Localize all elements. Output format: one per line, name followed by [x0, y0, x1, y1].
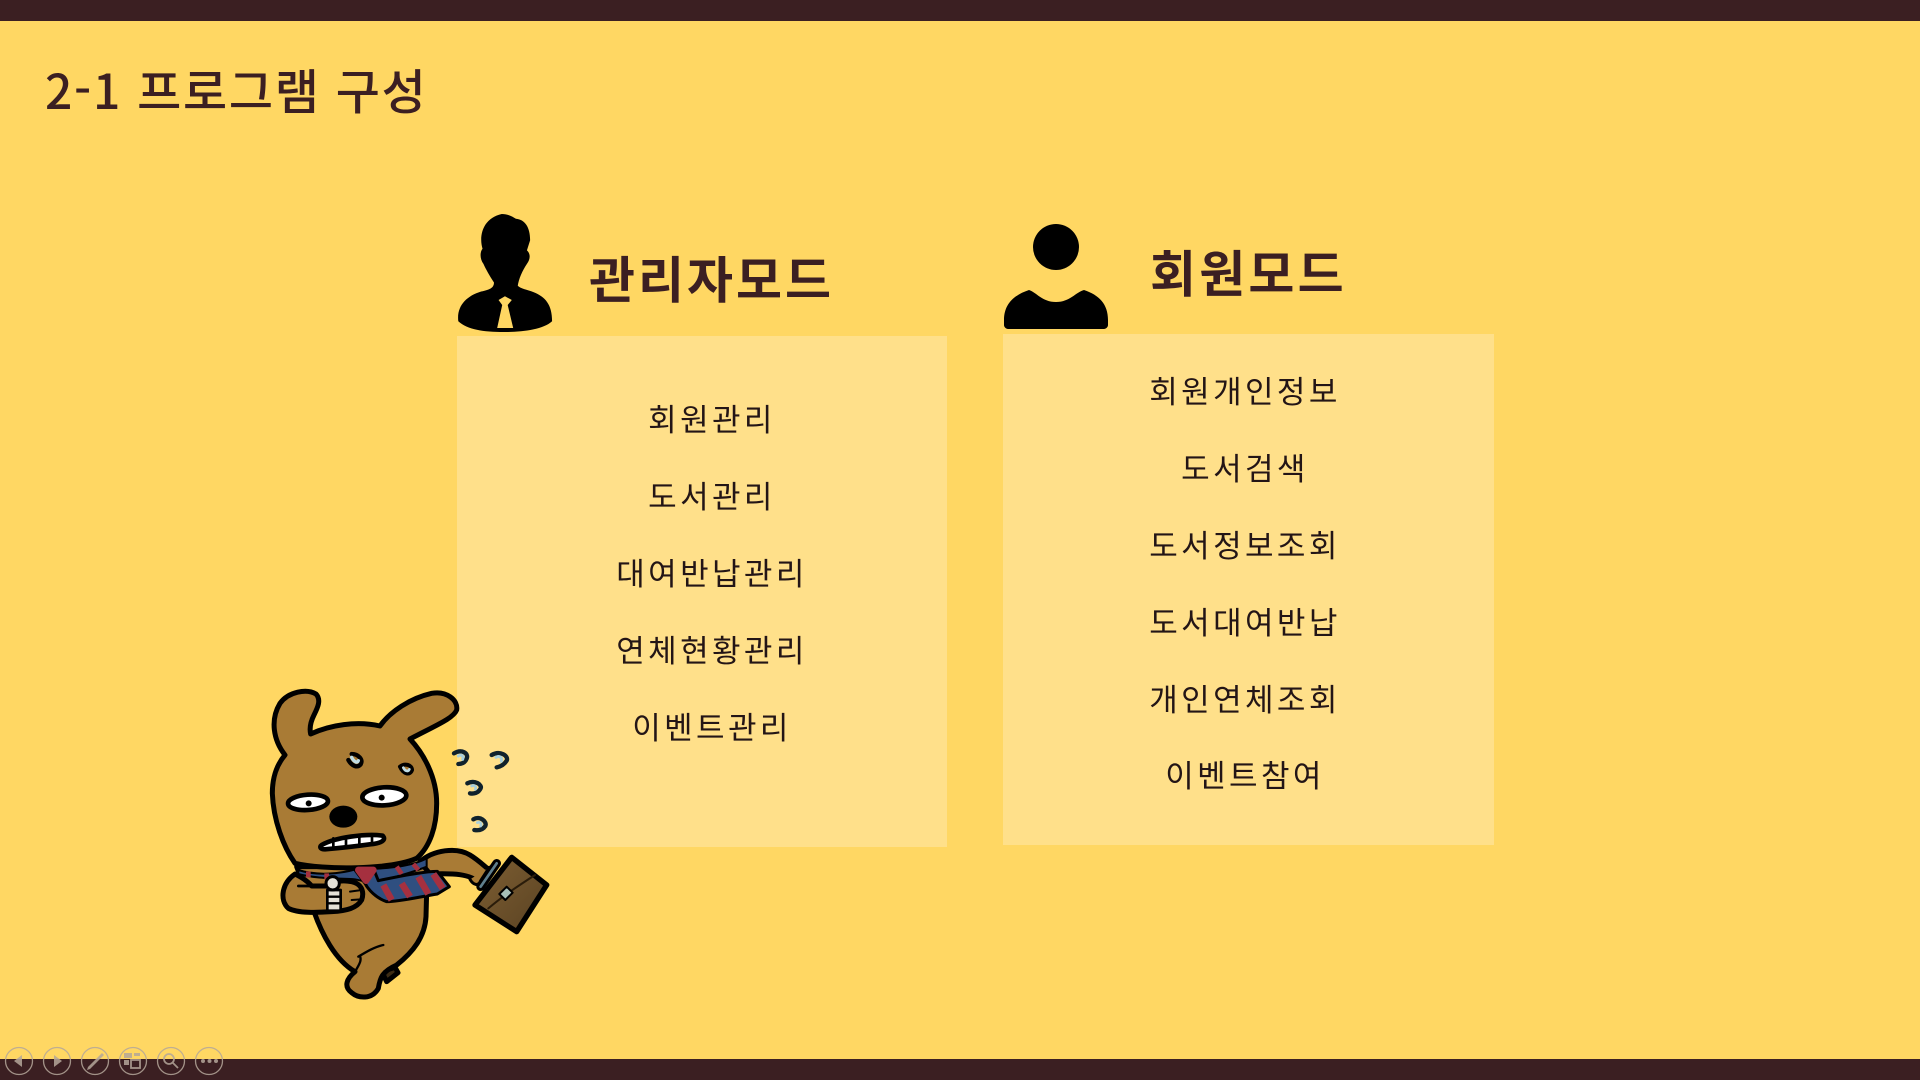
watch — [327, 890, 341, 911]
admin list item: 이벤트관리 — [632, 711, 792, 746]
panel: admin mode — [457, 336, 947, 847]
briefcase handle — [481, 863, 497, 887]
member list item: 개인연체조회 — [1149, 683, 1341, 718]
icon: admin person with tie — [458, 214, 552, 332]
admin list item: 대여반납관리 — [616, 557, 808, 592]
member list item: 도서정보조회 — [1149, 529, 1341, 564]
admin list item: 회원관리 — [648, 403, 776, 438]
mouth — [320, 835, 384, 849]
icon: member person — [1004, 224, 1108, 329]
scarf band — [298, 858, 427, 883]
pupils and nose — [306, 795, 385, 828]
title: 2-1 프로그램 구성 — [45, 53, 427, 123]
member list item: 도서검색 — [1181, 452, 1309, 487]
left arm and hand — [283, 874, 363, 912]
admin list item: 도서관리 — [648, 480, 776, 515]
briefcase — [475, 857, 547, 932]
member list item: 회원개인정보 — [1149, 375, 1341, 410]
heading: member mode: 회원모드 — [1150, 235, 1347, 307]
bottom bar — [0, 1059, 1920, 1080]
member list item: 이벤트참여 — [1165, 759, 1325, 794]
body — [297, 867, 427, 997]
panel: member mode — [1003, 334, 1494, 845]
eyes — [288, 793, 328, 811]
head and ears — [272, 691, 457, 868]
admin list item: 연체현황관리 — [616, 634, 808, 669]
back foot — [382, 967, 398, 982]
right arm — [420, 850, 489, 883]
member list item: 도서대여반납 — [1149, 606, 1341, 641]
slideshow toolbar — [4, 1046, 224, 1076]
heading: admin mode: 관리자모드 — [589, 241, 834, 313]
sweat drops — [348, 751, 507, 830]
top bar — [0, 0, 1920, 21]
illustration: running character with briefcase — [270, 688, 550, 1000]
hand on handle — [470, 867, 489, 884]
scarf tail — [355, 867, 449, 902]
